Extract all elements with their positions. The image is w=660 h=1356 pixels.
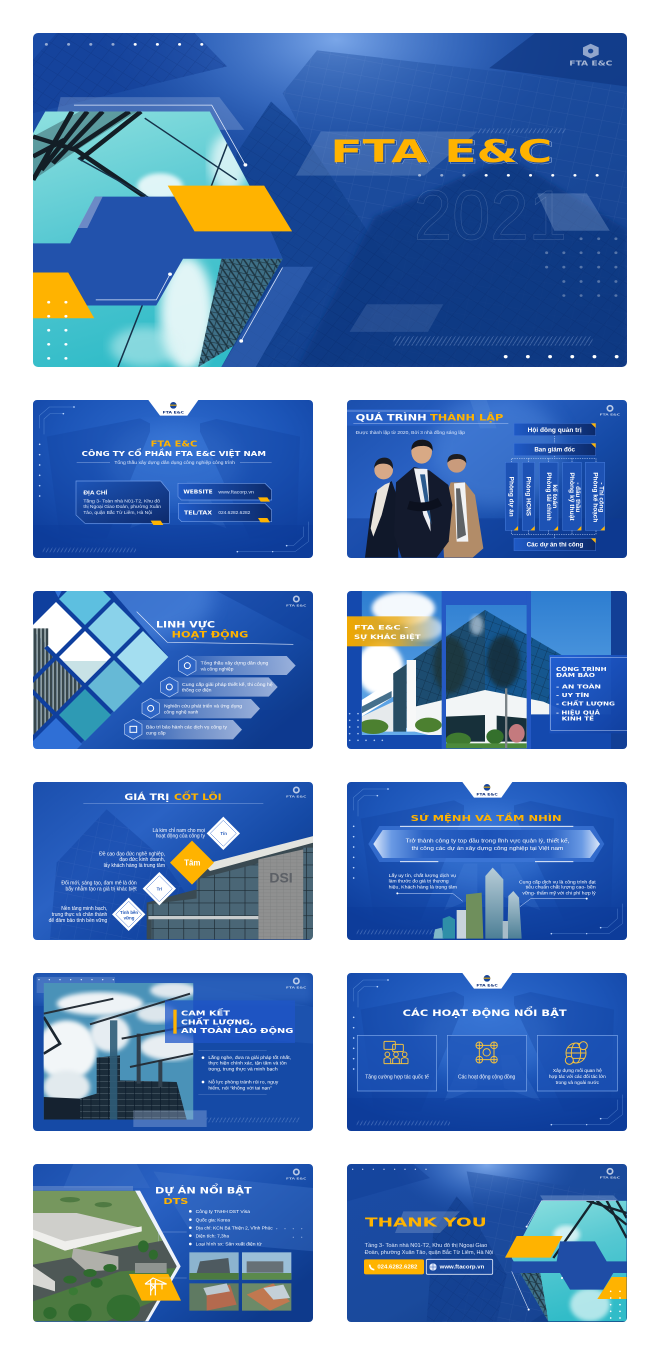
guarantee panel [549,655,629,733]
building photo [357,591,612,750]
logo [286,787,307,799]
title: FTA E&C [330,133,552,169]
address box [76,481,169,525]
year 2021: 2021 [414,176,567,254]
box: directors: Ban giám đốc [534,446,576,453]
logo tab: FTA E&C [163,411,185,415]
guarantee panel: - AN TOÀN [556,683,601,690]
teal glass photo [33,111,286,370]
address box: Tầng 3- Toàn nhà N01-T2, Khu đô [83,498,161,503]
service bar 4: cung cấp [146,730,166,736]
logo tab: FTA E&C [476,983,498,987]
heading block: CAM KẾT [181,1008,230,1018]
service bar 3: Nghiên cứu phát triển và ứng dụng [164,702,242,709]
blue band [33,197,283,306]
office building photo [147,836,313,939]
tel box [178,503,272,522]
commitments list: thực hiện chính xác, tận tâm và tôn [208,1061,287,1066]
heading: LINH VỰC [156,621,215,631]
heading [155,1184,252,1206]
card: partnerships [537,1035,617,1091]
logo: FTA E&C [286,986,307,990]
title: GIÁ TRỊ [124,791,169,803]
heading block [165,1000,295,1043]
gold banner: SỰ KHÁC BIỆT [354,632,422,641]
org chart [505,423,605,551]
title [83,790,263,804]
address: Tầng 3- Toàn nhà N01-T2, Khu đô thị Ngoại Giao [365,1243,487,1249]
value: Tính bền vững: Tính bền [120,910,138,915]
dots [45,43,619,360]
value: Tín [152,817,240,850]
phone button: 024.6282.6282 [377,1265,417,1271]
website button [426,1259,493,1274]
project facts: Quốc gia: Korea [196,1217,230,1222]
gold crane tile [129,1274,181,1301]
heading: HOẠT ĐỘNG [172,630,248,641]
title: CỐT LÕI [174,790,222,803]
tel box: TEL/TAX [184,510,212,516]
panel: cover slide [33,33,627,367]
blue band [512,1241,627,1290]
value: Trí: Đổi mới, sáng tạo, đam mê là đòn [61,880,137,887]
service bar 4 [125,719,242,739]
card: international cooperation: Tăng cường hợp tác quốc tế [365,1075,429,1081]
website box [178,483,272,502]
card: partnerships: Xây dựng mối quan hệ [553,1068,602,1074]
mission banner: Trở thành công ty top đầu trong lĩnh vực quản lý, thiết kế, [406,837,570,844]
guarantee panel: KINH TẾ [562,714,595,722]
left note [389,873,463,901]
right note: Cung cấp dịch vụ là công trình đạt [519,879,597,884]
value: Trí [61,872,176,905]
logo: FTA E&C [286,1177,307,1181]
phone button [364,1259,424,1274]
logo [600,406,621,417]
website button: www.ftacorp.vn [438,1265,484,1271]
panel: FTA difference slide [347,591,627,749]
heading: Tổng thầu xây dựng dân dụng công nghiệp công trình [114,459,235,466]
gold banner [346,616,440,646]
logo [569,44,612,68]
service bar 2: thống cơ điện [182,688,212,694]
project facts: Địa chỉ: KCN Bá Thiện 2, Vĩnh Phúc [196,1224,273,1230]
logo: FTA E&C [286,604,307,608]
panel: thank you slide [347,1164,627,1322]
panel: notable activities slide [347,973,627,1131]
value: Trí: Trí [157,886,163,891]
service bar 4: Bảo trì bảo hành các dịch vụ công ty [146,724,228,730]
value: Tính bền vững: Nền tảng minh bạch, [61,906,107,912]
value: Tâm: lấy khách hàng là trung tâm [104,863,165,869]
project facts: Công ty TNHH DST Visa [196,1209,250,1214]
service bar 3: công nghệ xanh [164,709,199,715]
departments [505,462,605,530]
logo [600,1169,621,1180]
card: community: Các hoạt động cộng đồng [458,1075,516,1081]
title: CÁC HOẠT ĐỘNG NỔI BẬT [403,1006,567,1019]
logo: FTA E&C [286,795,307,799]
service bar 1: Tổng thầu xây dựng dân dụng [201,659,269,666]
heading: THANK YOU [365,1215,487,1229]
title: QUÁ TRÌNH [356,411,427,423]
value: Tâm: đạo đức kinh doanh, [119,857,165,863]
value: Tín: Tín [220,831,227,836]
panel: mission and vision slide [347,782,627,940]
website box: www.ftacorp.vn [218,490,254,495]
address box: thị Ngoại Giao Đoàn, phường Xuân [83,504,162,509]
departments: Phòng tài chính [545,472,551,521]
address: Đoàn, phường Xuân Tảo, quận Bắc Từ Liêm, Hà Nội [365,1249,493,1256]
departments: Phòng HCNS [524,477,530,516]
value: Tâm [99,841,214,885]
commitments list: Lắng nghe, đưa ra giải pháp tốt nhất, [208,1054,291,1060]
box: board: Hội đồng quản trị [528,428,582,434]
decorative translucent shape [53,97,244,130]
title: THÀNH LẬP [430,411,504,423]
logo [286,596,307,608]
heading [77,440,272,466]
logo [286,978,307,990]
right note [519,879,597,907]
left note: làm thước đo giá trị thương [389,879,449,884]
logo: FTA E&C [600,413,621,417]
value: Tính bền vững: để đảm bảo tính bền vững [49,917,108,924]
construction photo [37,982,200,1120]
gold accent parallelograms [33,186,292,318]
guarantee panel: CÔNG TRÌNH [556,665,607,673]
card: international cooperation [357,1035,437,1091]
title: Được thành lập từ 2020, Bởi 3 nhà đồng sáng lập [356,429,465,436]
departments: kế toán [551,484,558,509]
title: SỨ MỆNH VÀ TẦM NHÌN [411,811,562,823]
gold banner: FTA E&C - [354,624,409,631]
panel: fields of activity slide [33,591,313,749]
tel box: 024.6282.6282 [218,510,251,515]
title [347,411,508,436]
logo tab [476,784,498,796]
service bar 2 [161,677,278,697]
project facts [158,1209,273,1278]
value: Tâm: Tâm [184,859,201,868]
panel: safety commitment slide [33,973,313,1131]
project facts: Diện tích: 7,3ha [196,1233,229,1238]
value: Tính bền vững: trung thực và chân thành [52,912,108,918]
panel: company info slide [33,400,313,558]
mission banner: thi công các dự án xây dựng công nghiệp tại Việt nam [412,846,564,852]
guarantee panel: - CHẤT LƯỢNG [556,700,615,708]
heading block: AN TOÀN LAO ĐỘNG [181,1026,293,1035]
gold shapes [505,1236,627,1299]
service bar 1 [179,656,296,676]
card: community [447,1035,527,1091]
heading: CÔNG TY CỔ PHẦN FTA E&C VIỆT NAM [82,448,266,458]
value: Tín: hoạt động của công ty [156,833,205,840]
logo: FTA E&C [569,59,612,68]
heading: FTA E&C [151,440,198,449]
panel: featured project slide [33,1164,313,1322]
guarantee panel: ĐẢM BẢO [556,671,595,679]
address box: Tảo, quận Bắc Từ Liêm, Hà Nội [83,509,152,515]
guarantee panel: - UY TÍN [556,691,589,699]
commitments list: trọng, trung thực và minh bạch [208,1067,278,1072]
mission banner [368,826,604,862]
heading block: CHẤT LƯỢNG, [181,1016,254,1026]
value: Tín: Là kim chỉ nam cho mọi [152,827,205,834]
heading: DTS [163,1196,188,1206]
glass photo [510,1201,630,1324]
title: FTA E&C [332,135,554,171]
logo tab: FTA E&C [476,792,498,796]
commitments list: hiểm, nói “không với tai nạn” [208,1084,272,1090]
service bar 2: Cung cấp giải pháp thiết kế, thi công hệ [182,682,273,688]
left note: hiệu, Khách hàng là trọng tâm [389,884,457,889]
founders photo [365,440,483,558]
guarantee panel: - HIỆU QUẢ [556,708,600,716]
address [365,1243,493,1256]
departments: - đấu thầu [574,482,581,513]
value: Tâm: Đề cao đạo đức nghề nghiệp, [99,851,165,857]
service bar 3 [142,698,260,718]
project facts: Loại hình sx: Sản xuất điện tử [196,1241,262,1247]
panel: founding and org chart slide [347,400,627,558]
commitments list: Nỗ lực phòng tránh rủi ro, nguy [208,1078,279,1084]
skyline [433,868,522,939]
left note: Lấy uy tín, chất lượng dịch vụ [389,873,457,878]
commitments list [198,1050,291,1094]
logo tab [476,975,498,987]
project thumbnails [189,1252,291,1311]
value: Tính bền vững [49,898,145,931]
right note: tiêu chuẩn chất lượng cao- bền [526,884,596,890]
logo [286,1169,307,1181]
website box: WEBSITE [183,490,213,496]
departments: Phòng kỹ thuật [568,472,574,521]
service bar 1: và công nghiệp [201,666,234,672]
departments: - Thi công [597,482,603,513]
card: partnerships: trong và ngoài nước [556,1080,600,1086]
background towers [33,33,627,367]
aerial site photo [33,1191,181,1322]
right note: vững- thẩm mỹ với chi phí hợp lý [522,890,596,896]
card: partnerships: hợp tác với các đối tác lớn [549,1074,606,1080]
box: projects: Các dự án thi công [527,543,584,549]
logo: FTA E&C [600,1176,621,1180]
departments: Phòng dự án [507,477,513,517]
value: Trí: bẩy nhằm tạo ra giá trị khác biệt [66,886,137,893]
heading: DỰ ÁN NỔI BẬT [155,1184,252,1197]
heading [137,612,293,644]
departments: Phòng kế hoạch [591,472,598,523]
value: Tính bền vững: vững [124,915,135,920]
panel: core values slide [33,782,313,940]
logo tab [163,402,185,415]
address box: ĐỊA CHỈ [83,489,108,496]
diamond photo grid [1,573,168,770]
office building photo: DSI [269,870,293,886]
